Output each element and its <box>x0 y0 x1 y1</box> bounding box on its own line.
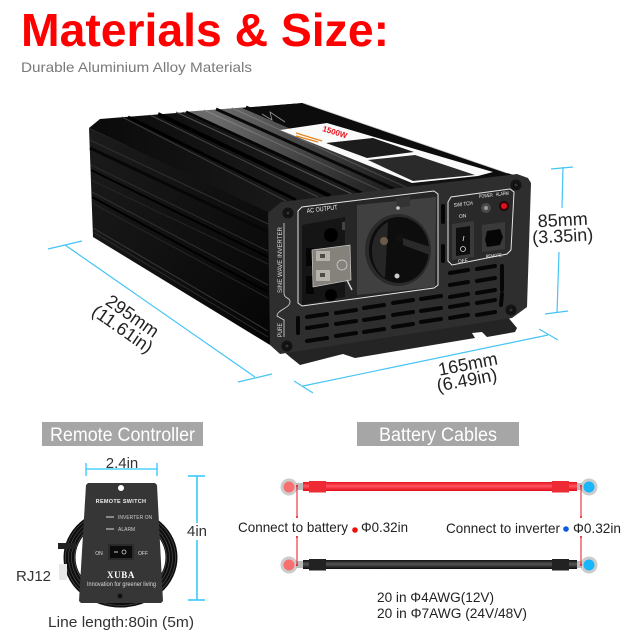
red battery cable <box>280 478 598 496</box>
inverter top face with fins <box>89 103 517 212</box>
heading: battery cables <box>357 422 519 446</box>
bottom hole <box>118 594 122 598</box>
control labels: SWI TCH <box>454 201 473 209</box>
dimension: remote width: 2.4in <box>106 455 138 472</box>
title: Materials & Size: <box>21 4 389 56</box>
inverter side face <box>89 128 270 345</box>
dimension: height 85mm: 85mm <box>537 209 588 231</box>
pure sine wave label: SINE WAVE INVERTER <box>278 226 284 293</box>
power and alarm LEDs <box>481 201 509 213</box>
inverter product illustration <box>89 103 531 365</box>
RJ port <box>482 222 505 252</box>
remote rocker switch <box>95 544 148 560</box>
callout: connect to battery: Φ0.32in <box>361 519 408 535</box>
callout: connect to inverter: Φ0.32in <box>573 520 621 536</box>
terminal block <box>302 217 352 305</box>
dimension: remote width <box>86 455 157 476</box>
black battery cable <box>280 556 598 574</box>
control frame <box>448 189 514 265</box>
dimension: height 85mm: (3.35in) <box>532 224 594 248</box>
indicators <box>106 515 152 533</box>
heading: remote controller: Remote Controller <box>50 425 196 446</box>
brand: XUBA <box>107 570 135 580</box>
cable specifications: 20 in Φ4AWG(12V) <box>377 590 494 605</box>
inverter front panel <box>268 174 531 354</box>
callout: connect to battery <box>238 519 408 535</box>
connector leader lines <box>296 485 582 566</box>
ventilation slots <box>298 206 502 341</box>
control labels: POWER <box>479 193 493 200</box>
subtitle: Durable Aluminium Alloy Materials <box>21 59 252 75</box>
dimension: length 295mm <box>48 241 272 382</box>
label: line length: Line length:80in (5m) <box>48 614 194 631</box>
dimension: width 165mm: 165mm <box>436 349 499 380</box>
schuko socket <box>357 196 436 295</box>
dimension: length 295mm: (11.61in) <box>88 301 157 357</box>
remote rocker switch: OFF <box>138 551 148 557</box>
rocker switch <box>452 221 474 260</box>
dimension: width 165mm <box>294 329 558 396</box>
pure sine wave label <box>277 223 290 337</box>
dimension: width 165mm: (6.49in) <box>435 364 499 396</box>
callout: connect to inverter: Connect to inverter <box>446 520 560 536</box>
callout: connect to battery: Connect to battery <box>238 519 348 535</box>
cable specifications <box>377 590 527 621</box>
top label sticker <box>242 103 507 183</box>
label: RJ12: RJ12 <box>16 568 51 585</box>
AC output frame <box>298 191 438 306</box>
indicators: INVERTER ON <box>118 515 152 521</box>
remote panel <box>79 483 163 603</box>
AC output label: AC OUTPUT <box>306 204 338 215</box>
remote rocker switch: ON <box>95 551 103 557</box>
dimension: remote height <box>187 476 207 600</box>
control labels <box>454 191 509 265</box>
coiled cable <box>66 510 176 606</box>
corner screws <box>282 180 521 351</box>
control labels: ON <box>459 213 467 220</box>
RJ12 plug <box>58 543 76 580</box>
heading: battery cables: Battery Cables <box>379 425 497 446</box>
panel mounting hole <box>118 485 124 491</box>
pure sine wave label: PURE <box>278 323 284 337</box>
cable specifications: 20 in Φ7AWG (24V/48V) <box>377 606 527 621</box>
remote controller illustration <box>58 483 176 606</box>
dimension: length 295mm: 295mm <box>102 291 163 341</box>
callout: connect to inverter <box>446 520 621 536</box>
control labels: ALARM <box>496 191 509 198</box>
control labels: REMOTE <box>486 252 502 259</box>
dimension: height 85mm <box>532 167 594 314</box>
dimension: remote height: 4in <box>187 523 207 540</box>
indicators: ALARM <box>118 527 135 533</box>
tagline: Innovation for greener living <box>87 582 156 588</box>
top label sticker: 1500W <box>321 124 349 140</box>
control labels: OFF <box>458 258 468 265</box>
mounting foot <box>282 316 517 365</box>
panel title: REMOTE SWITCH <box>96 499 146 505</box>
